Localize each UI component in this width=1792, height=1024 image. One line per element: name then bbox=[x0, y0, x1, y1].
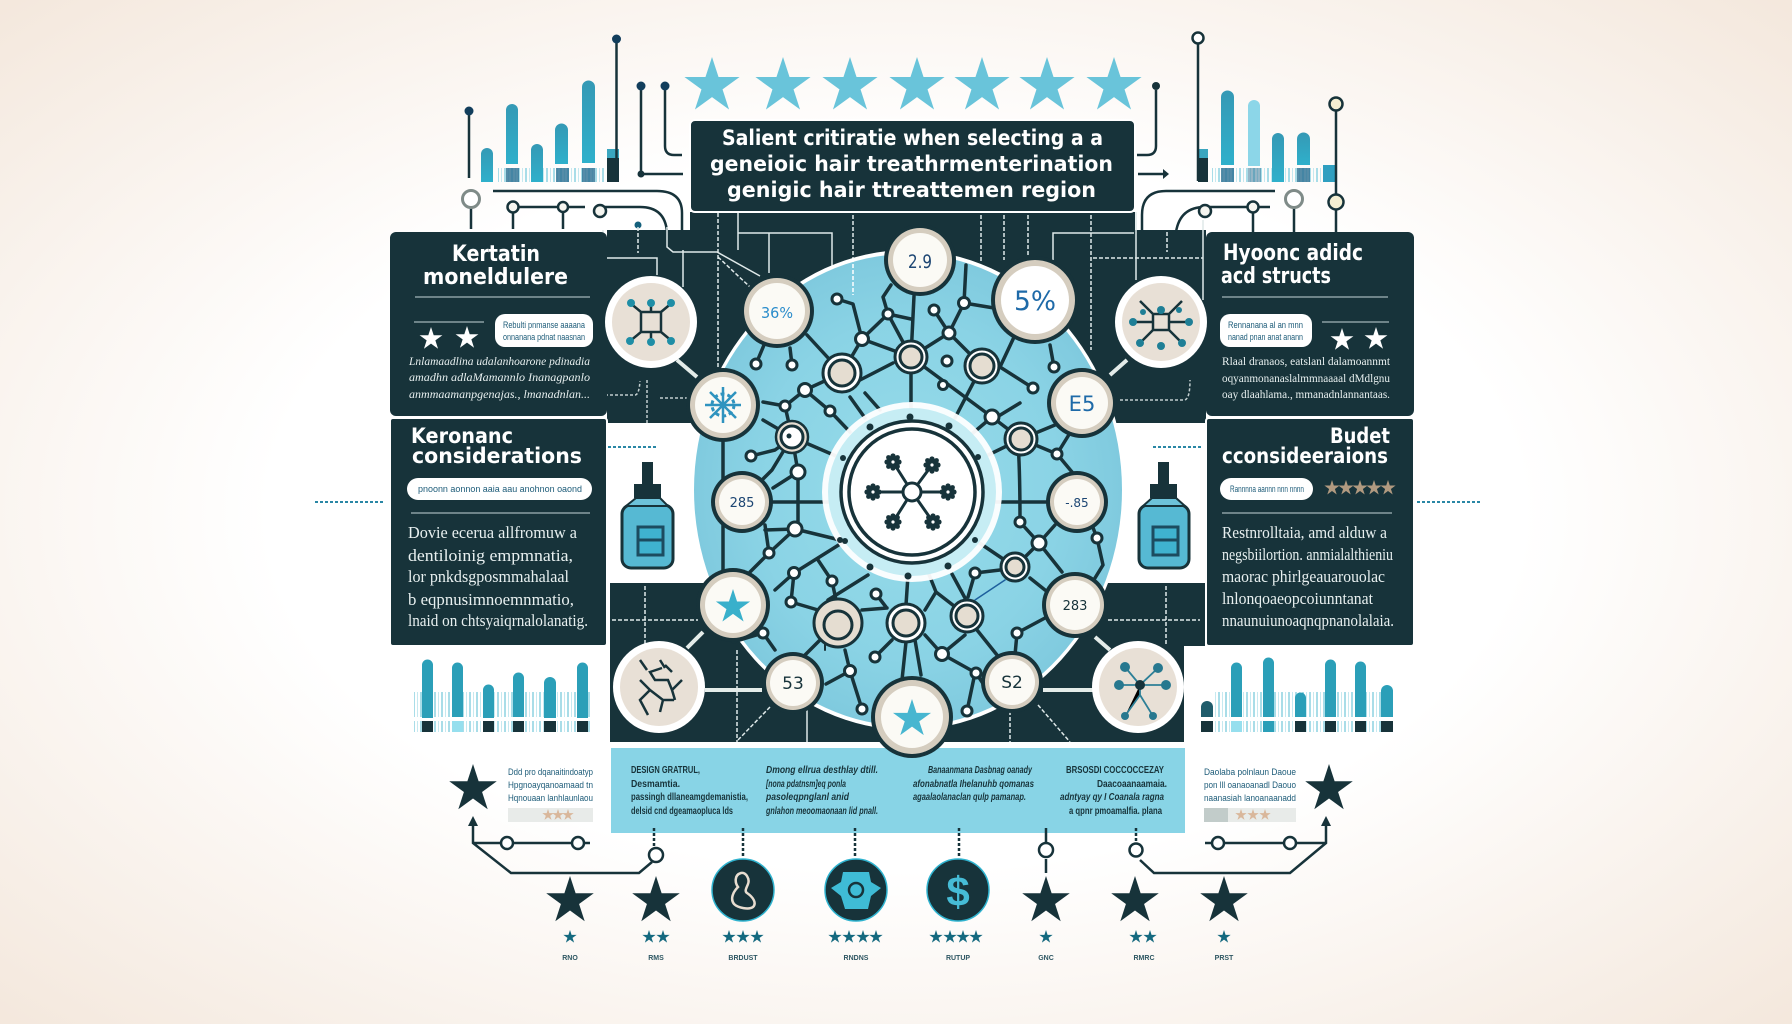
stat node: 5%: 5% bbox=[1014, 286, 1056, 317]
dashed side ticks bbox=[315, 447, 1480, 502]
stat node: -.85: -.85 bbox=[1065, 496, 1089, 510]
network links bbox=[723, 265, 1103, 711]
icon: molecule top left bbox=[605, 276, 697, 368]
panel: Budget considerations: nnaunuiunoaqnqpnanolalaia. bbox=[1222, 611, 1394, 630]
icon: serum bottle right bbox=[1139, 462, 1189, 568]
panel: Kertatin moneldulere: moneldulere bbox=[423, 265, 568, 290]
panel: Budget considerations: Restnrolltaia, amd alduw a bbox=[1222, 523, 1387, 542]
panel: Hyoonc adidc acd structs bbox=[1206, 232, 1414, 416]
panel: Hyoonc adidc acd structs: Rennanana al an mnn bbox=[1228, 320, 1303, 330]
light blue summary band: DESIGN GRATRUL, bbox=[631, 765, 700, 776]
connector lines left of title bbox=[462, 190, 1344, 232]
stat node: 5% bbox=[991, 256, 1079, 344]
panel: Keronanc considerations: Dovie ecerua allfromuw a bbox=[408, 523, 577, 542]
title banner: Salient critiratie when selecting a a bbox=[722, 126, 1103, 150]
icon: molecule top right bbox=[1115, 276, 1207, 368]
side note: lower right: Daolaba polnlaun Daoue bbox=[1204, 767, 1296, 777]
side note: lower left bbox=[508, 767, 593, 822]
title banner: geneioic hair treathrmenterination bbox=[710, 152, 1113, 176]
icon: dollar badge bbox=[927, 859, 989, 921]
icon: dollar badge: $ bbox=[946, 868, 970, 915]
mini rating labels: RMRC bbox=[1134, 955, 1154, 962]
central hub bbox=[822, 402, 1002, 582]
icon node: teal star bottom bbox=[871, 676, 953, 758]
panel: Keronanc considerations: dentiloinig empmnatia, bbox=[408, 546, 573, 565]
light blue summary band: [nona pdatnsm]eq ponla bbox=[765, 779, 846, 790]
mini star ratings bbox=[563, 930, 1231, 943]
panel: Budget considerations: Budet bbox=[1330, 424, 1390, 448]
panel: Keronanc considerations: Keronanc bbox=[411, 424, 513, 448]
large dark stars bbox=[449, 764, 1353, 921]
panel: Budget considerations bbox=[1206, 418, 1414, 646]
panel: Budget considerations: maorac phirlgeauarouolac bbox=[1222, 567, 1385, 586]
side note: lower left: Hpgnoayqanoamaad tn bbox=[508, 780, 593, 790]
panel: Kertatin moneldulere: Rebulti pnmanse aaaana bbox=[503, 320, 585, 330]
light blue summary band: adntyay qy I Coanala ragna bbox=[1060, 792, 1164, 803]
stat node: 2.9 bbox=[884, 224, 956, 296]
bar chart: top left bbox=[464, 34, 683, 182]
icon: hat badge bbox=[825, 859, 887, 921]
stat node: 53 bbox=[762, 652, 824, 714]
panel: Kertatin moneldulere bbox=[390, 232, 607, 416]
light blue summary band: delsid cnd dgeamaopluca lds bbox=[631, 806, 733, 817]
mini rating labels: RUTUP bbox=[946, 955, 970, 962]
title banner: genigic hair ttreattemen region bbox=[727, 178, 1096, 202]
stat node: 283: 283 bbox=[1063, 599, 1087, 614]
icon node: teal star left bbox=[696, 568, 770, 642]
top row of rating stars bbox=[684, 57, 1142, 109]
stat node: 283 bbox=[1042, 572, 1108, 638]
stat node: 53: 53 bbox=[782, 674, 804, 694]
panel: Budget considerations: lnlonqoaeopcoiunntanat bbox=[1222, 589, 1373, 608]
panel: Kertatin moneldulere: Kertatin bbox=[452, 242, 540, 267]
panel: Kertatin moneldulere: onnanana pdnat naasnan bbox=[503, 332, 585, 342]
flow arrows to large stars bbox=[468, 816, 1331, 873]
panel: Keronanc considerations: lnaid on chtsyaiqrnalolanatig. bbox=[408, 611, 588, 630]
icon: molecule bottom right bbox=[1092, 641, 1184, 733]
side note: lower right: pon lll oanaoanadl Daouo bbox=[1204, 780, 1296, 790]
light blue summary band: Desmamtia. bbox=[631, 779, 680, 790]
panel: Budget considerations: negsbiilortion. anmialalthieniu bbox=[1222, 545, 1393, 564]
stat node: 285: 285 bbox=[730, 496, 754, 511]
panel: Hyoonc adidc acd structs: Hyoonc adidc bbox=[1223, 241, 1363, 266]
stat node: S2 bbox=[981, 651, 1043, 713]
white connector spokes bbox=[677, 360, 1127, 690]
stat node: -.85 bbox=[1046, 471, 1108, 533]
panel: Hyoonc adidc acd structs: oay dlaahlama., mmanadnlannantaas. bbox=[1222, 387, 1390, 401]
panel: Hyoonc adidc acd structs: acd structs bbox=[1221, 264, 1331, 289]
stat node: E5 bbox=[1047, 368, 1117, 438]
light blue summary band: Daacoaanaamaia. bbox=[1097, 779, 1167, 790]
side note: lower right bbox=[1204, 767, 1296, 822]
bar chart: lower right bbox=[1200, 658, 1393, 732]
panel: Keronanc considerations: considerations bbox=[412, 444, 582, 468]
stat node: E5: E5 bbox=[1069, 392, 1095, 416]
circuit traces in dark band bbox=[603, 212, 1203, 742]
side note: lower left: Ddd pro dqanaitindoatyp bbox=[508, 767, 593, 777]
title banner bbox=[690, 120, 1135, 212]
mini rating labels: RNO bbox=[562, 955, 578, 962]
small junction dots bbox=[746, 294, 1102, 716]
panel: Keronanc considerations bbox=[390, 418, 607, 646]
side note: lower left: Hqnouaan lanhlaunlaou bbox=[508, 793, 593, 803]
mini rating labels: RNDNS bbox=[844, 955, 869, 962]
mini rating labels: PRST bbox=[1215, 955, 1234, 962]
light blue summary band: BRSOSDI COCCOCCEZAY bbox=[1066, 765, 1164, 776]
mini rating labels: BRDUST bbox=[728, 955, 758, 962]
panel: Hyoonc adidc acd structs: oqyanmonanaslalmmnaaaal dMdlgnu bbox=[1222, 371, 1390, 385]
panel: Kertatin moneldulere: anmmaamanpgenajas., lmanadnlan... bbox=[409, 387, 590, 401]
panel: Keronanc considerations: b eqpnusimnoemnmatio, bbox=[408, 590, 574, 609]
bar chart: lower left bbox=[414, 660, 590, 732]
bar chart: top right bbox=[1137, 32, 1342, 194]
panel: Budget considerations: Rannnna aannn nnn nnnn bbox=[1230, 484, 1304, 494]
panel: Keronanc considerations: lor pnkdsgposmmahalaal bbox=[408, 567, 569, 586]
central network disc bbox=[691, 250, 1125, 730]
stat node: 2.9: 2.9 bbox=[908, 251, 932, 273]
icon node: blue flower bbox=[686, 368, 760, 442]
icon: molecule bottom left bbox=[613, 641, 705, 733]
hub marker dots bbox=[837, 414, 981, 580]
panel: Kertatin moneldulere: amadhn adlaMamannlo Inanagpanlo bbox=[409, 370, 590, 384]
stat node: 36% bbox=[740, 274, 814, 348]
light blue summary band: Banaanmana Dasbnag oanady bbox=[928, 765, 1032, 776]
light blue summary band: pasoleqpnglanl anid bbox=[765, 792, 850, 803]
panel: Hyoonc adidc acd structs: Rlaal dranaos, eatslanl dalamoannmt bbox=[1222, 354, 1391, 368]
dark backing panel: upper band bbox=[607, 212, 1206, 423]
panel: Budget considerations: cconsideeraions bbox=[1222, 444, 1388, 468]
light blue summary band: passingh dllaneamgdemanistia, bbox=[631, 792, 748, 803]
stat node: 36%: 36% bbox=[761, 304, 793, 322]
icon: hair silhouette badge bbox=[712, 859, 774, 921]
beige ring nodes bbox=[776, 341, 1037, 647]
panel: Hyoonc adidc acd structs: nanad pnan anat anann bbox=[1228, 332, 1303, 342]
mini rating labels bbox=[562, 955, 1234, 962]
stat node: S2: S2 bbox=[1001, 673, 1023, 693]
mini rating labels: RMS bbox=[648, 955, 664, 962]
icon: serum bottle left bbox=[622, 462, 673, 568]
side note: lower right: naanasiah lanoanaanadd bbox=[1204, 793, 1296, 803]
panel: Keronanc considerations: pnoonn aonnon aaia aau anohnon oaond bbox=[418, 484, 582, 494]
mini rating labels: GNC bbox=[1038, 955, 1054, 962]
stat node: 285 bbox=[711, 471, 773, 533]
dark backing panel: lower band bbox=[610, 583, 1205, 742]
light blue summary band bbox=[611, 748, 1185, 833]
light blue summary band: agaalaolanaclan qulp pamanap. bbox=[913, 792, 1026, 803]
light blue summary band: gnlahon meoomaonaan lid pnall. bbox=[765, 806, 878, 817]
light blue summary band: afonabnatla Ihelanuhb qomanas bbox=[913, 779, 1034, 790]
light blue summary band: a qpnr pmoamalfia. plana bbox=[1069, 806, 1162, 817]
panel: Kertatin moneldulere: Lnlamaadlina udalanhoarone pdinadia bbox=[408, 354, 590, 368]
light blue summary band: Dmong ellrua desthlay dtill. bbox=[766, 765, 878, 776]
